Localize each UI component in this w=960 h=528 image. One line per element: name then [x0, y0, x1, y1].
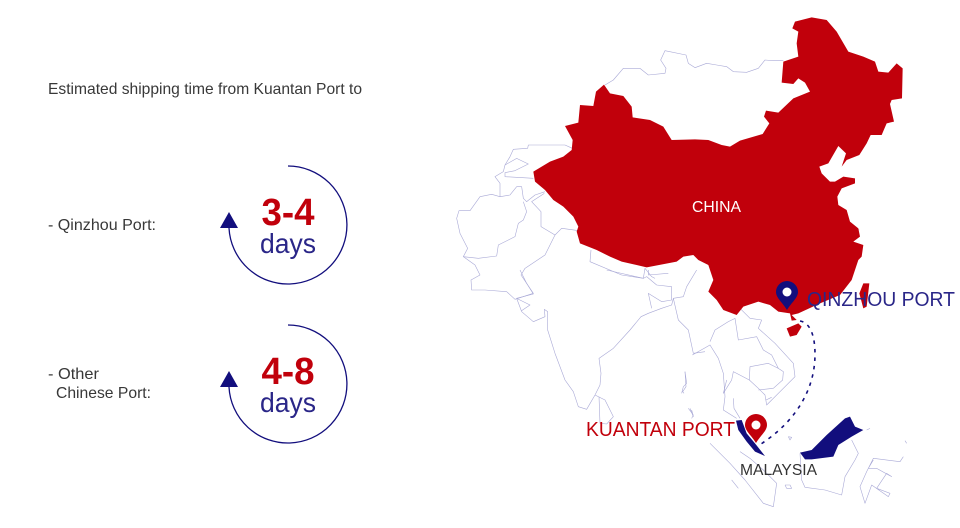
- label: Other Chinese Port: Chinese Port:: [56, 385, 151, 402]
- timer: 3-4 days: 3-4: [262, 192, 314, 234]
- timer: 4-8 days: [220, 325, 347, 443]
- map: Taiwan: [859, 283, 869, 308]
- map: Mongolia outline: [605, 51, 859, 230]
- heading: estimated shipping time: Estimated shipping time from Kuantan Port to: [48, 81, 362, 98]
- timer: 3-4 days: [220, 166, 347, 284]
- label: Qinzhou Port: - Qinzhou Port:: [48, 217, 156, 234]
- label: Other Chinese Port: [48, 366, 151, 402]
- map: Indonesia outlines: [710, 397, 907, 507]
- map: India and Sri Lanka outlines: [517, 270, 705, 424]
- shipping route: [761, 321, 815, 444]
- pin: Kuantan: [745, 414, 767, 443]
- timer: 4-8 days: 4-8: [262, 351, 314, 393]
- pin: Qinzhou: [776, 281, 798, 310]
- label: Qinzhou Port: QINZHOU PORT: [807, 289, 955, 311]
- label: China: CHINA: [692, 199, 741, 216]
- timer: 4-8 days: days: [260, 387, 316, 418]
- map: Malaysia: [736, 417, 863, 459]
- label: Malaysia: MALAYSIA: [740, 462, 817, 479]
- label: Kuantan Port: KUANTAN PORT: [586, 419, 735, 441]
- map: Indochina outlines: [683, 308, 795, 418]
- map: China: [533, 17, 903, 337]
- label: Other Chinese Port: - Other: [48, 366, 100, 383]
- timer: 3-4 days: days: [260, 228, 316, 259]
- map: Central Asia and Pakistan outlines: [457, 145, 655, 299]
- map: Hainan: [787, 323, 802, 337]
